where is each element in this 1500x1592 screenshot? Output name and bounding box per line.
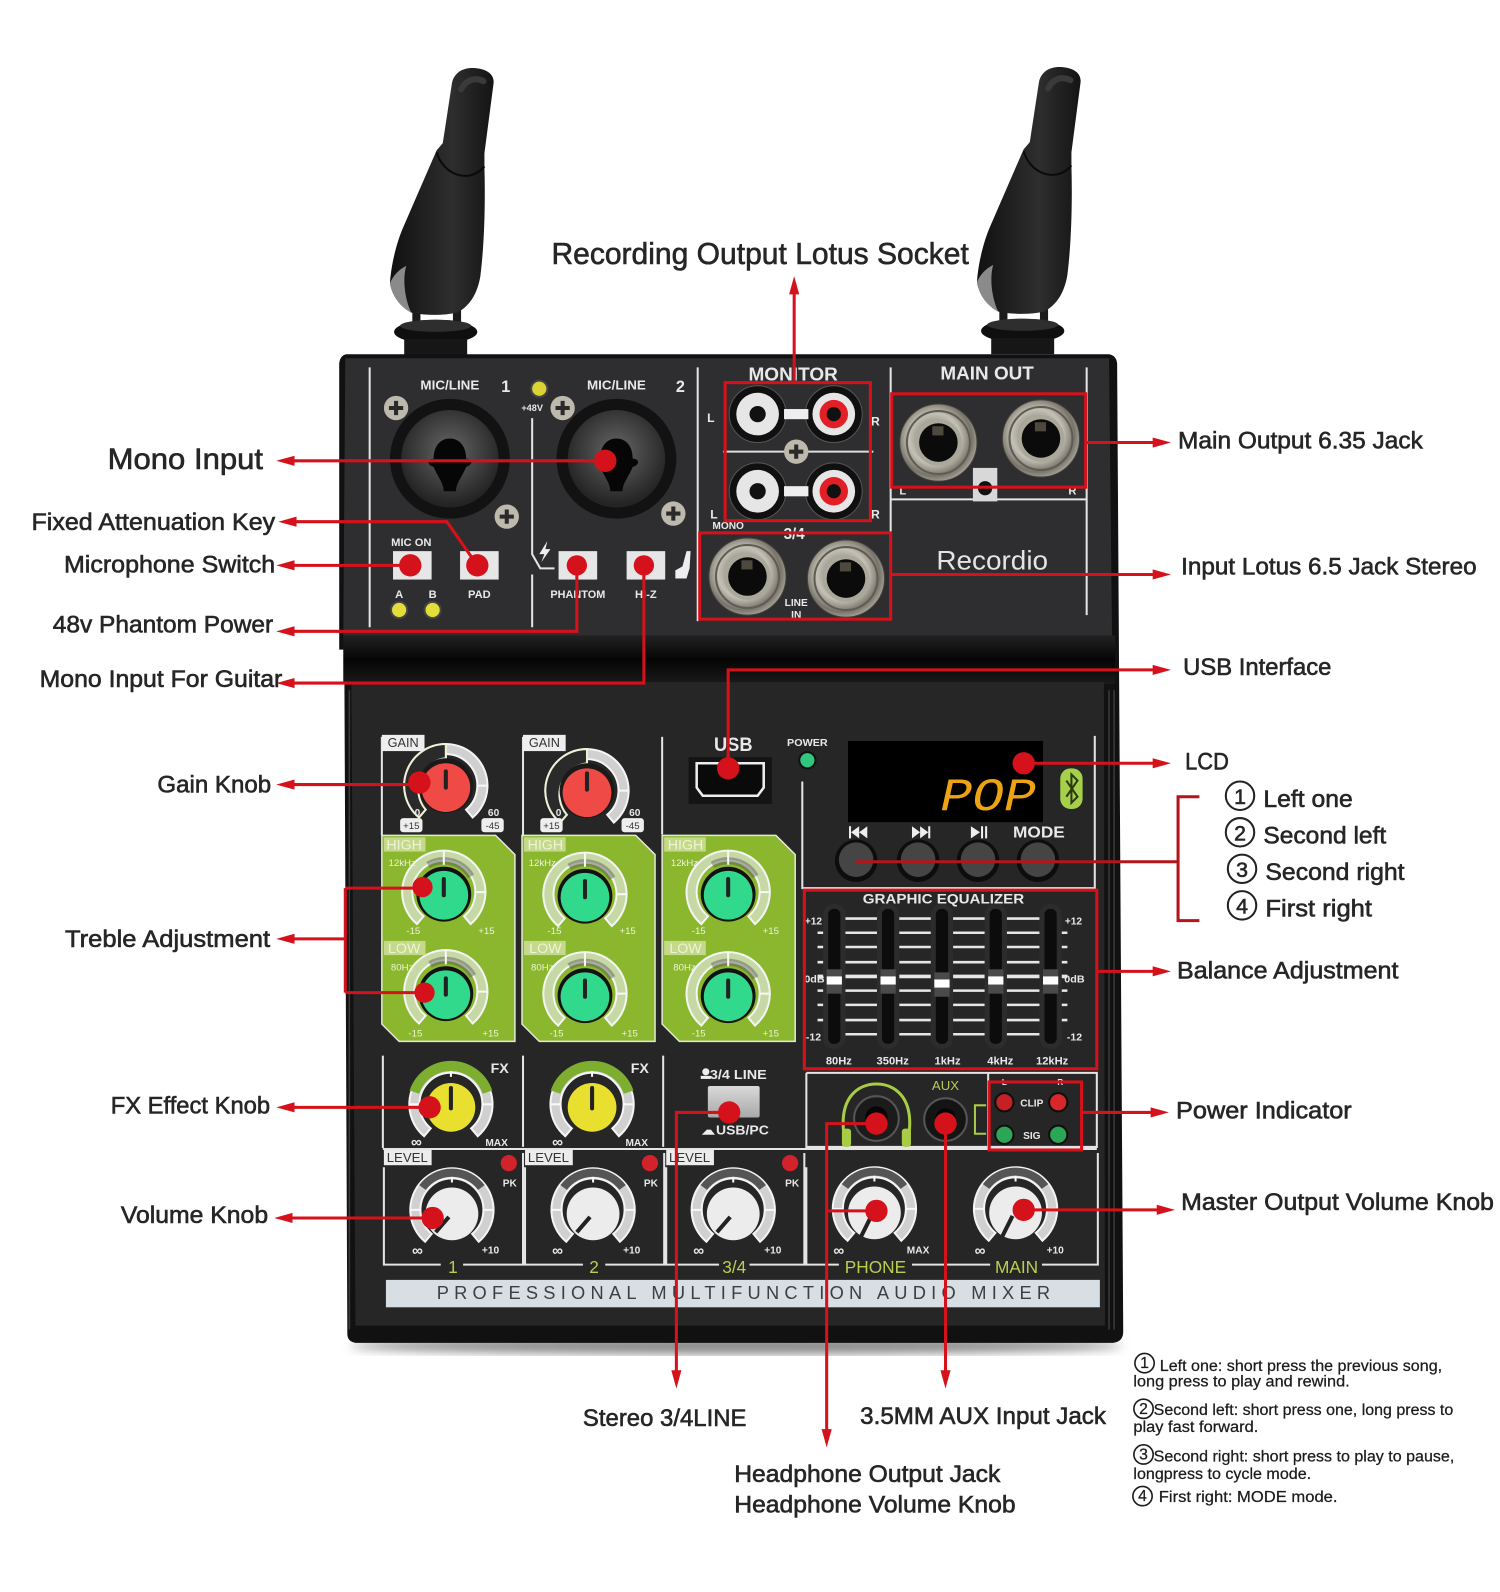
EQ panel labels: HIGH (528, 838, 563, 854)
switches panel (391, 537, 691, 618)
monitor panel: MONITOR (748, 364, 838, 385)
phones and aux jacks (842, 1078, 986, 1147)
button legend: 1 (1234, 785, 1246, 809)
button instructions text block: play fast forward. (1133, 1419, 1258, 1436)
callout lines and arrows (274, 276, 1199, 1447)
button instructions text block (1133, 1353, 1454, 1506)
level labels: LEVEL (387, 1150, 428, 1165)
LCD display: POP (940, 772, 1036, 825)
red highlight boxes (700, 383, 1097, 1150)
label: 3.5MM AUX Input Jack: 3.5MM AUX Input Jack (860, 1403, 1107, 1430)
switches panel: MIC ON (391, 537, 431, 549)
FX knobs: FX (631, 1061, 649, 1077)
level labels: PK (785, 1179, 800, 1190)
main out panel: R (1068, 485, 1076, 497)
button instructions text block: 4 (1138, 1488, 1147, 1505)
gain knobs: 0 (415, 808, 421, 819)
level labels: PHONE (845, 1257, 906, 1277)
phones and aux jacks: AUX (932, 1078, 959, 1093)
button legend: First right (1265, 896, 1372, 923)
mic inputs panel: 2 (676, 378, 685, 396)
power LED: POWER (787, 738, 828, 749)
label: Volume Knob: Volume Knob (121, 1202, 268, 1229)
level labels: PK (644, 1179, 659, 1190)
EQ panel labels: 12kHz (389, 858, 416, 869)
graphic equalizer: 80Hz (826, 1056, 852, 1068)
level labels: +10 (1047, 1246, 1064, 1257)
button instructions text block: 1 (1140, 1355, 1149, 1372)
green EQ panels (382, 835, 795, 1041)
monitor panel: R (871, 508, 880, 522)
label: Main Output 6.35 Jack: Main Output 6.35 Jack (1178, 428, 1424, 455)
button legend: 4 (1236, 894, 1248, 918)
button instructions text block: Left one: short press the previous song, (1160, 1358, 1442, 1375)
gain knobs: 0 (556, 808, 562, 819)
USB port (689, 735, 772, 804)
button legend: Second left (1263, 822, 1386, 849)
EQ panel labels: +15 (478, 926, 495, 937)
level labels: LEVEL (528, 1150, 569, 1165)
EQ panel labels: HIGH (386, 838, 422, 854)
EQ panel labels: 80Hz (391, 962, 414, 973)
gain knobs: +15 (543, 821, 560, 832)
player buttons: MODE (1013, 824, 1065, 841)
main out panel: L (899, 485, 906, 497)
label: Gain Knob: Gain Knob (157, 772, 271, 799)
label: 48v Phantom Power: 48v Phantom Power (53, 611, 273, 638)
button instructions text block: 2 (1139, 1401, 1148, 1418)
level labels (384, 1150, 1064, 1277)
EQ panel labels (384, 837, 779, 1039)
label: Fixed Attenuation Key: Fixed Attenuation Key (31, 509, 276, 536)
label: Master Output Volume Knob: Master Output Volume Knob (1181, 1189, 1494, 1216)
gain knobs: 60 (629, 808, 641, 819)
label: Balance Adjustment: Balance Adjustment (1177, 957, 1399, 984)
line in panel: LINE (785, 598, 808, 609)
graphic equalizer: 12kHz (1036, 1056, 1069, 1068)
line in panel (709, 521, 885, 621)
level labels: ∞ (552, 1243, 563, 1260)
level labels: MAIN (995, 1257, 1038, 1277)
graphic equalizer: 0dB (1064, 975, 1085, 986)
button legend: Left one (1263, 786, 1353, 813)
graphic equalizer: 4kHz (987, 1056, 1014, 1068)
button legend (1226, 782, 1405, 923)
FX knobs: MAX (485, 1138, 508, 1149)
EQ panel labels: -15 (406, 926, 420, 937)
EQ panel labels: -15 (408, 1028, 422, 1039)
line in panel: IN (791, 610, 801, 621)
graphic equalizer (804, 891, 1085, 1068)
EQ panel labels: +15 (482, 1028, 499, 1039)
mic inputs panel: MIC/LINE (420, 378, 480, 393)
graphic equalizer: -12 (1067, 1032, 1082, 1043)
level labels: ∞ (975, 1243, 986, 1260)
level labels: +10 (482, 1246, 499, 1257)
graphic equalizer: -12 (806, 1032, 821, 1043)
main out panel (899, 363, 1080, 501)
label: Microphone Switch: Microphone Switch (64, 551, 275, 578)
high and low EQ knobs (402, 851, 770, 1026)
line in panel: MONO (712, 521, 744, 532)
EQ panel labels: +15 (621, 1028, 638, 1039)
button legend: 2 (1234, 821, 1246, 845)
EQ panel labels: LOW (388, 941, 421, 957)
monitor panel: R (871, 414, 880, 428)
FX knobs: ∞ (411, 1134, 422, 1151)
gain knobs: 60 (488, 808, 500, 819)
label: Input Lotus 6.5 Jack Stereo: Input Lotus 6.5 Jack Stereo (1181, 553, 1477, 580)
label: LCD: LCD (1185, 748, 1229, 775)
switches panel: B (429, 589, 437, 601)
label: Mono Input: Mono Input (108, 443, 263, 476)
clip and signal LEDs (995, 1078, 1067, 1144)
level labels: MAX (907, 1246, 930, 1257)
EQ panel labels: -15 (692, 1028, 706, 1039)
EQ panel labels: +15 (763, 1028, 779, 1039)
3/4 line switch: USB/PC (716, 1123, 769, 1138)
monitor panel (707, 364, 880, 522)
graphic equalizer: +12 (805, 917, 822, 928)
LCD display (848, 741, 1043, 825)
mixer body (339, 354, 1123, 1354)
graphic equalizer: 350Hz (877, 1056, 909, 1068)
switches panel: HI-Z (635, 589, 657, 601)
label: Recording Output Lotus Socket: Recording Output Lotus Socket (551, 237, 969, 271)
level labels: ∞ (412, 1243, 423, 1260)
gain knobs: -45 (486, 821, 500, 832)
monitor panel: L (707, 411, 715, 425)
button instructions text block: First right: MODE mode. (1159, 1489, 1338, 1506)
mic inputs panel (384, 378, 686, 529)
label: Headphone Output Jack and Volume Knob: Headphone Output Jack (734, 1461, 1001, 1488)
clip and signal LEDs: SIG (1023, 1131, 1041, 1142)
switches panel: PHANTOM (550, 589, 605, 601)
EQ panel labels: +15 (763, 926, 779, 937)
label: Headphone Output Jack and Volume Knob (734, 1461, 1016, 1518)
EQ panel labels: 12kHz (671, 858, 698, 869)
graphic equalizer: +12 (1065, 917, 1082, 928)
gain knobs: GAIN (529, 736, 560, 750)
button instructions text block: Second right: short press to play to pause, (1154, 1449, 1454, 1466)
label: Power Indicator: Power Indicator (1176, 1098, 1352, 1125)
EQ panel labels: HIGH (668, 838, 703, 854)
line in panel: 3/4 (784, 526, 805, 543)
clip and signal LEDs: CLIP (1020, 1098, 1044, 1109)
level labels: +10 (623, 1246, 641, 1257)
level knobs (410, 1167, 1057, 1242)
power LED (787, 738, 828, 768)
FX knobs: MAX (625, 1138, 648, 1149)
label: FX Effect Knob: FX Effect Knob (111, 1092, 270, 1119)
3/4 line switch: 3/4 LINE (710, 1067, 767, 1082)
bluetooth badge (1060, 768, 1083, 809)
right antenna (977, 67, 1081, 354)
main out panel: MAIN OUT (940, 363, 1034, 384)
gain knobs: -45 (626, 821, 640, 832)
EQ panel labels: -15 (692, 926, 706, 937)
brand text: Recordio (936, 545, 1048, 575)
top panel: dividers (370, 367, 1087, 627)
model banner: PROFESSIONAL MULTIFUNCTION AUDIO MIXER (437, 1282, 1050, 1303)
button instructions text block: 3 (1139, 1447, 1148, 1464)
FX knobs: FX (491, 1061, 509, 1077)
level labels: 1 (448, 1257, 458, 1277)
label: Mono Input For Guitar: Mono Input For Guitar (40, 666, 282, 693)
FX knobs (409, 1061, 649, 1151)
EQ panel labels: -15 (548, 926, 561, 937)
switches panel: PAD (468, 589, 491, 601)
gain knobs (382, 735, 644, 832)
button legend: 3 (1236, 858, 1248, 882)
FX knobs: ∞ (552, 1134, 563, 1151)
USB port: USB (714, 735, 753, 756)
graphic equalizer: 1kHz (935, 1056, 961, 1068)
level labels: 2 (589, 1257, 599, 1277)
switches panel: A (395, 589, 403, 601)
left antenna (390, 68, 494, 355)
button instructions text block: long press to play and rewind. (1133, 1373, 1350, 1390)
button instructions text block: Second left: short press one, long press to (1154, 1402, 1454, 1419)
EQ panel labels: LOW (529, 941, 562, 957)
EQ panel labels: 12kHz (529, 858, 556, 869)
level labels: LEVEL (669, 1150, 710, 1165)
level labels: ∞ (693, 1243, 704, 1260)
label: Stereo 3/4LINE: Stereo 3/4LINE (583, 1405, 746, 1432)
mic inputs panel: MIC/LINE (587, 378, 646, 393)
3/4 line switch (701, 1067, 769, 1138)
mic inputs panel: 1 (501, 378, 510, 396)
graphic equalizer: 0dB (804, 975, 825, 986)
channel section lines (382, 736, 1098, 1265)
clip and signal LEDs: L (1002, 1078, 1007, 1087)
monitor panel: L (710, 508, 718, 522)
EQ panel labels: 80Hz (673, 962, 696, 973)
mic inputs panel: +48V (521, 403, 544, 413)
graphic equalizer: GRAPHIC EQUALIZER (863, 891, 1024, 907)
EQ panel labels: +15 (619, 926, 636, 937)
EQ panel labels: 80Hz (531, 962, 554, 973)
clip and signal LEDs: R (1057, 1078, 1063, 1087)
EQ panel labels: -15 (550, 1028, 563, 1039)
level labels: ∞ (833, 1243, 844, 1260)
EQ panel labels: LOW (669, 941, 702, 957)
gain knobs: GAIN (388, 736, 419, 750)
gain knobs: +15 (403, 821, 419, 832)
level labels: +10 (764, 1246, 782, 1257)
player buttons (835, 824, 1065, 882)
label: Headphone Output Jack and Volume Knob: Headphone Volume Knob (734, 1491, 1016, 1518)
level labels: 3/4 (722, 1257, 747, 1277)
label: USB Interface: USB Interface (1183, 654, 1331, 681)
level labels: PK (503, 1179, 518, 1190)
model banner (386, 1280, 1100, 1307)
button legend: Second right (1265, 859, 1405, 886)
label: Treble Adjustment: Treble Adjustment (65, 926, 270, 953)
button instructions text block: longpress to cycle mode. (1133, 1466, 1311, 1483)
